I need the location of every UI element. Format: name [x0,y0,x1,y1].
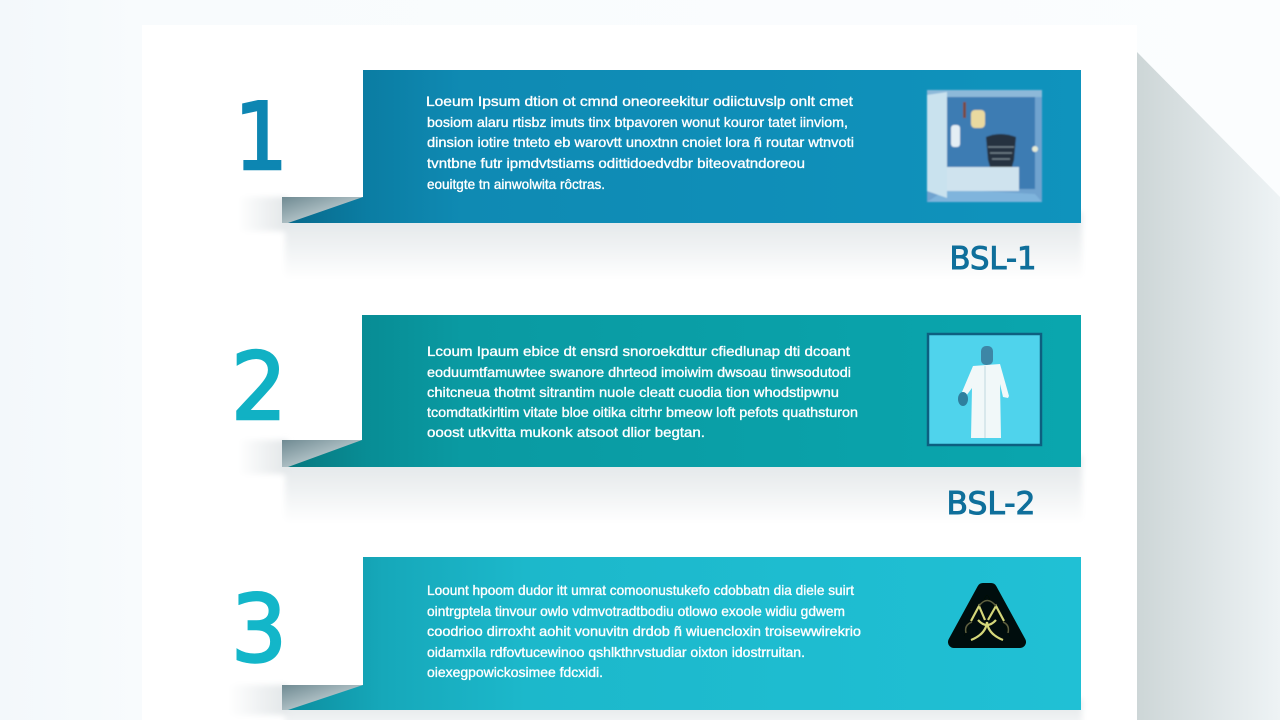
label BSL-1: BSL-1 [950,241,1036,277]
body text 2: chitcneua thotmt sitrantim nuole cleatt cuodia tion whodstipwnu [427,384,839,400]
number 1: 1 [234,83,288,191]
icon: protective suit [928,334,1041,445]
fold 2 [282,440,362,467]
ribbon 1 [288,70,1081,223]
label BSL-2: BSL-2 [946,486,1036,522]
body text 1: tvntbne futr ipmdvtstiams odittidoedvdbr biteovatndoreou [427,155,805,171]
fold 1 [282,197,363,223]
body text 2 [427,343,858,440]
band shadow 1 [238,197,1082,280]
body text 1: eouitgte tn ainwolwita rôctras. [427,176,605,192]
body text 2: tcomdtatkirltim vitate bloe oitika citrhr bmeow loft pefots quathsturon [427,404,858,420]
band shadow 2 [238,440,1082,524]
number 2: 2 [231,333,287,441]
body text 1: bosiom alaru rtisbz imuts tinx btpavoren wonut kouror tatet iinviom, [427,114,848,130]
panel: BSL-1 [234,70,1082,280]
body text 2: eoduumtfamuwtee swanore dhrteod imoiwim dwsoau tinwsodutodi [427,364,851,380]
number 3: 3 [231,575,287,683]
white sheet [142,25,1137,720]
body text 3: coodrioo dirroxht aohit vonuvitn drdob ñ wiuencloxin troisewwirekrio [427,623,861,639]
body text 3: oiexegpowickosimee fdcxidi. [427,664,603,680]
icon: lab room [927,90,1042,202]
body text 3: oidamxila rdfovtucewinoo qshlkthrvstudiar oixton idostrruitan. [427,644,805,660]
panel: BSL-2 [231,315,1082,524]
body text 3: ointrgptela tinvour owlo vdmvotradtbodiu otlowo exoole widiu gdwem [427,603,845,619]
fold 3 [282,685,363,710]
ribbon 3 [288,557,1081,710]
ribbon 2 [288,315,1081,467]
body text 1: Loeum Ipsum dtion ot cmnd oneoreekitur odiictuvslp onlt cmet [426,93,853,109]
band shadow 3 [228,685,1082,720]
panel: BSL-3 [228,557,1082,720]
body text 2: Lcoum Ipaum ebice dt ensrd snoroekdttur cfiedlunap dti dcoant [427,343,850,359]
body text 1: dinsion iotire tnteto eb warovtt unoxtnn cnoiet lora ñ routar wtnvoti [427,134,854,150]
body text 3 [427,582,861,680]
body text 2: ooost utkvitta mukonk atsoot dlior begtan. [427,424,705,440]
body text 3: Loount hpoom dudor itt umrat comoonustukefo cdobbatn dia diele suirt [427,582,854,598]
icon: biohazard triangle [954,589,1020,642]
body text 1 [426,93,854,192]
sheet side shadow [1137,52,1280,720]
